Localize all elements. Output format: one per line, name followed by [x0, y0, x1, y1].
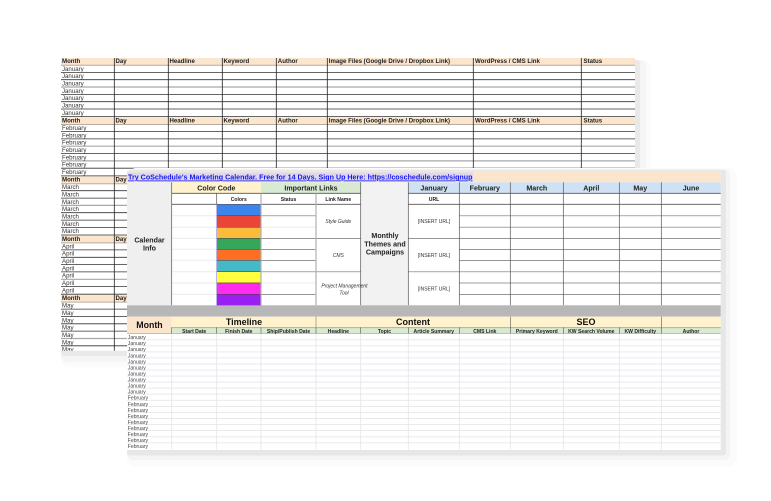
back sheet header labels — [62, 58, 603, 302]
back sheet header labels: Month — [62, 295, 81, 302]
lower table month labels: February — [128, 444, 149, 450]
back sheet month labels: April — [62, 265, 74, 272]
back sheet month labels: March — [62, 184, 79, 191]
lower table header: KW Search Volume — [568, 329, 615, 335]
back sheet month labels: February — [62, 140, 87, 147]
months table: May — [633, 184, 647, 192]
back sheet shadow — [61, 60, 651, 367]
important links panel: CMS — [333, 253, 345, 259]
back sheet month labels: April — [62, 243, 74, 250]
back sheet header labels: Month — [62, 177, 81, 184]
lower table header: CMS Link — [473, 329, 497, 335]
back sheet header labels: Day — [116, 236, 127, 243]
back sheet month labels: May — [62, 303, 74, 310]
months table — [408, 182, 721, 294]
back sheet header labels: Day — [116, 177, 127, 184]
important links panel: Important Links — [284, 184, 338, 192]
back sheet header labels: Day — [116, 295, 127, 302]
calendar info panel: Calendar — [134, 236, 165, 244]
lower table header: Start Date — [182, 329, 206, 335]
lower table month labels: January — [128, 341, 146, 347]
important links panel: Tool — [339, 290, 350, 296]
lower table month labels: January — [128, 365, 146, 371]
important links panel: Link Name — [325, 197, 351, 203]
color code panel: Color Code — [197, 184, 236, 192]
color swatches — [217, 204, 261, 305]
months table: January — [420, 184, 448, 192]
lower table header: Article Summary — [414, 329, 454, 335]
months table: [INSERT URL] — [418, 253, 451, 259]
lower table header: Month — [136, 320, 163, 330]
lower table header: Finish Date — [225, 329, 253, 335]
lower table header: Topic — [378, 329, 391, 335]
back sheet month labels: March — [62, 199, 79, 206]
lower table month labels: February — [128, 396, 149, 402]
back sheet header labels: Status — [584, 117, 603, 124]
lower table header: Author — [683, 329, 699, 335]
back sheet month labels: February — [62, 169, 87, 176]
lower table month labels: February — [128, 432, 149, 438]
lower table month labels: February — [128, 420, 149, 426]
back sheet header labels: WordPress / CMS Link — [475, 58, 541, 65]
back sheet header labels: Day — [116, 117, 127, 124]
back sheet header labels: Headline — [170, 117, 196, 124]
important links panel: Project Management — [321, 284, 368, 290]
front spreadsheet: marketing calendar — [127, 168, 737, 467]
lower table header: Headline — [328, 329, 349, 335]
back sheet month labels: January — [62, 95, 85, 102]
back sheet header labels: Month — [62, 117, 81, 124]
lower table month labels: February — [128, 408, 149, 414]
lower table month labels: February — [128, 426, 149, 432]
back sheet month labels: January — [62, 80, 85, 88]
color code panel — [172, 182, 261, 305]
lower table month labels: February — [128, 402, 149, 408]
months table: [INSERT URL] — [418, 286, 451, 292]
back sheet month labels: January — [62, 110, 85, 117]
back sheet month labels: February — [62, 125, 87, 132]
back sheet month labels: April — [62, 280, 74, 287]
back sheet header labels: Headline — [170, 58, 196, 65]
back sheet month labels: May — [62, 347, 74, 354]
lower table month labels: January — [128, 347, 146, 353]
lower table header: SEO — [576, 317, 596, 327]
months table: June — [683, 184, 699, 192]
back sheet month labels: April — [62, 258, 74, 265]
months table: March — [526, 184, 547, 192]
monthly themes and campaigns panel: Themes and — [364, 240, 406, 248]
back sheet month labels: February — [62, 162, 87, 169]
monthly themes and campaigns panel — [361, 182, 408, 305]
lower table month labels: January — [128, 353, 146, 359]
gray divider band — [127, 305, 721, 317]
back sheet month labels: March — [62, 214, 79, 220]
back sheet month labels: February — [62, 147, 87, 154]
back sheet month labels: January — [62, 88, 85, 95]
important links panel: Status — [281, 197, 296, 203]
months table: April — [583, 184, 599, 192]
back sheet header labels: Author — [278, 58, 298, 65]
back spreadsheet: monthly content table — [61, 58, 651, 367]
lower table month labels: January — [128, 378, 146, 384]
back sheet header labels: Keyword — [224, 58, 250, 65]
back sheet month labels: February — [62, 132, 87, 139]
lower table month labels — [128, 335, 149, 450]
lower table month labels: February — [128, 438, 149, 444]
back sheet month labels: March — [62, 228, 79, 235]
back sheet month labels: January — [62, 66, 85, 73]
lower table header: KW Difficulty — [624, 329, 656, 335]
back sheet month labels: April — [62, 251, 74, 258]
back sheet month labels: March — [62, 221, 79, 228]
back sheet month labels: February — [62, 154, 87, 161]
back sheet month labels: May — [62, 332, 74, 339]
lower table month labels: January — [128, 390, 146, 396]
important links panel: Style Guide — [325, 219, 351, 225]
calendar info panel — [127, 182, 172, 305]
front sheet shadow — [127, 168, 737, 467]
lower table header: Content — [396, 317, 430, 327]
monthly themes and campaigns panel: Monthly — [371, 232, 399, 240]
back sheet header labels: Month — [62, 58, 81, 65]
lower table header: Timeline — [226, 317, 262, 327]
lower table month labels: January — [128, 384, 146, 390]
back sheet month labels: May — [62, 339, 74, 346]
back sheet month labels — [62, 66, 87, 354]
lower table month labels: January — [128, 372, 146, 378]
back sheet header labels: Author — [278, 117, 298, 124]
months table: February — [470, 184, 500, 192]
color code panel: Colors — [231, 197, 247, 203]
lower table header — [127, 317, 721, 335]
lower table header: Ship/Publish Date — [267, 329, 310, 335]
lower table month labels: February — [128, 414, 149, 420]
back sheet month labels: January — [62, 73, 85, 80]
important links panel — [261, 182, 368, 296]
back sheet header labels: Month — [62, 236, 81, 243]
back sheet header labels: Keyword — [224, 117, 250, 124]
months table: URL — [429, 197, 439, 203]
months table: [INSERT URL] — [418, 219, 451, 225]
back sheet month labels: March — [62, 192, 79, 198]
back sheet month labels: January — [62, 102, 85, 110]
lower table grid — [127, 334, 721, 450]
back sheet month labels: May — [62, 317, 74, 324]
back sheet header labels: WordPress / CMS Link — [475, 117, 541, 124]
lower table header: Primary Keyword — [516, 329, 558, 335]
back sheet month labels: May — [62, 325, 74, 332]
lower table month labels: January — [128, 359, 146, 365]
back sheet header bands — [61, 58, 635, 302]
back sheet header labels: Image Files (Google Drive / Dropbox Link) — [329, 117, 450, 124]
back sheet header labels: Day — [116, 58, 127, 65]
back sheet header labels: Image Files (Google Drive / Dropbox Link) — [329, 58, 450, 65]
back sheet month labels: April — [62, 273, 74, 280]
monthly themes and campaigns panel: Campaigns — [366, 248, 404, 256]
promo banner — [127, 171, 721, 182]
calendar info panel: Info — [143, 245, 157, 253]
back sheet month labels: May — [62, 310, 74, 317]
promo banner: Try CoSchedule's Marketing Calendar. Free for 14 Days. Sign Up Here: https://coschedule.com/signup — [128, 172, 473, 182]
back sheet header labels: Status — [584, 58, 603, 65]
lower table month labels: January — [128, 335, 146, 341]
back sheet month labels: March — [62, 206, 79, 213]
back sheet month labels: April — [62, 287, 74, 294]
